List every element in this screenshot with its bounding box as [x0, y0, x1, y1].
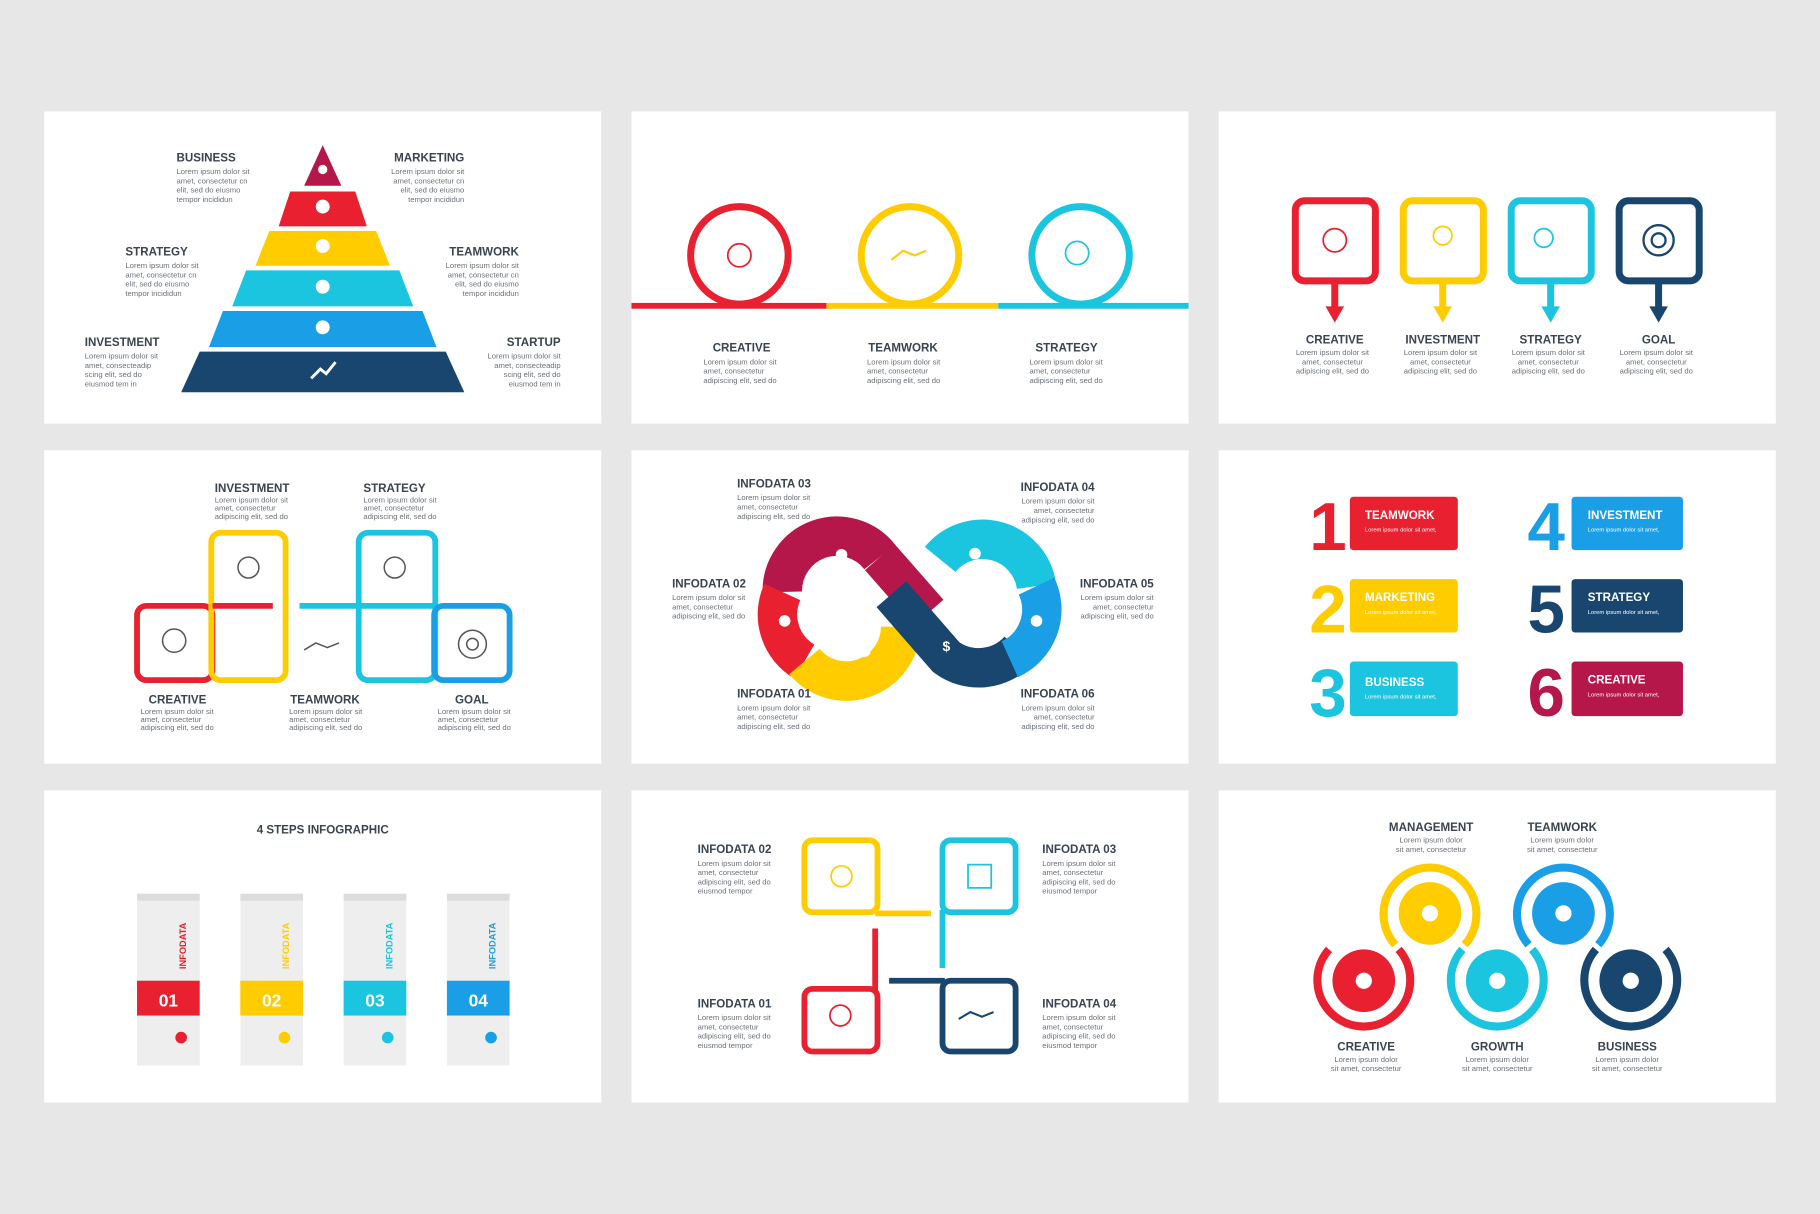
labels: Lorem ipsum dolor sit [1404, 348, 1478, 357]
pillars: 02 [262, 990, 281, 1010]
tab labels: BUSINESS [1365, 676, 1424, 689]
tab labels: Lorem ipsum dolor sit amet, [1588, 610, 1660, 616]
text: marketing: MARKETING [394, 151, 464, 164]
labels: adipiscing elit, sed do [438, 723, 511, 732]
text: business: BUSINESS [176, 151, 236, 164]
text: startup [487, 336, 562, 388]
labels: INFODATA 03 [737, 477, 811, 490]
text: teamwork [867, 342, 941, 385]
text: teamwork: Lorem ipsum dolor sit [867, 357, 941, 366]
panel: 4 steps pillars [44, 790, 601, 1103]
text: teamwork: Lorem ipsum dolor sit [446, 261, 520, 270]
rings [1317, 868, 1677, 1027]
panel: infinity: Lorem ipsum dolor sit [1021, 497, 1095, 506]
text: marketing: elit, sed do eiusmo [400, 186, 464, 195]
text: strategy: Lorem ipsum dolor sit [125, 261, 199, 270]
panel: ring circles [1219, 790, 1776, 1103]
tab labels: CREATIVE [1588, 674, 1646, 687]
text: teamwork: TEAMWORK [868, 342, 938, 355]
labels: Lorem ipsum dolor [1596, 1055, 1659, 1064]
labels: INFODATA 04 [1042, 997, 1117, 1010]
labels: Lorem ipsum dolor sit [737, 493, 811, 502]
infinity icons: $ [942, 638, 950, 654]
tab labels: TEAMWORK [1365, 509, 1435, 522]
labels: adipiscing elit, sed do [289, 723, 362, 732]
text: strategy: Lorem ipsum dolor sit [1030, 357, 1104, 366]
labels: eiusmod tempor [1042, 887, 1098, 896]
text: investment: amet, consecteadip [85, 361, 151, 370]
tabs: 3 [1309, 656, 1347, 731]
labels [672, 477, 811, 731]
infinity icons [779, 548, 1042, 657]
labels: TEAMWORK [1527, 821, 1598, 834]
text: startup: STARTUP [507, 336, 561, 349]
labels: adipiscing elit, sed do [737, 722, 810, 731]
tabs: 6 [1527, 656, 1565, 731]
text: startup: Lorem ipsum dolor sit [487, 352, 562, 361]
labels: adipiscing elit, sed do [737, 512, 810, 521]
panel: four boxes [631, 790, 1189, 1103]
text: business: tempor incididun [176, 195, 233, 204]
labels: adipiscing elit, sed do [1404, 367, 1477, 376]
boxes and connectors [804, 840, 1016, 1052]
labels: eiusmod tempor [1042, 1041, 1098, 1050]
labels: MANAGEMENT [1389, 821, 1473, 834]
text: creative: CREATIVE [713, 342, 771, 355]
labels: Lorem ipsum dolor sit [215, 496, 289, 505]
labels: Lorem ipsum dolor sit [1042, 859, 1116, 868]
text: teamwork [446, 245, 520, 298]
pillars: INFODATA [281, 922, 291, 969]
labels: amet, consectetur [1042, 868, 1104, 877]
labels: amet, consectetur [698, 1022, 759, 1031]
labels: Lorem ipsum dolor sit [438, 707, 512, 716]
pyramid layers [181, 145, 464, 392]
panel: pointer boxes [1219, 111, 1776, 424]
labels: Lorem ipsum dolor sit [672, 593, 746, 602]
labels: GOAL [455, 693, 489, 706]
text: strategy [125, 245, 199, 298]
text: investment: scing elit, sed do [85, 370, 142, 379]
tab labels: Lorem ipsum dolor sit amet, [1365, 695, 1437, 701]
pillars: INFODATA [178, 922, 188, 969]
labels: BUSINESS [1598, 1040, 1657, 1053]
labels: Lorem ipsum dolor [1531, 836, 1594, 845]
title: 4 STEPS INFOGRAPHIC [257, 823, 389, 836]
labels: Lorem ipsum dolor sit [1296, 348, 1370, 357]
labels: adipiscing elit, sed do [141, 723, 214, 732]
text: creative: amet, consectetur [703, 367, 765, 376]
labels: Lorem ipsum dolor sit [698, 859, 772, 868]
labels: GROWTH [1471, 1040, 1524, 1053]
text: strategy: STRATEGY [1035, 342, 1098, 355]
pillars: 01 [159, 990, 178, 1010]
panel: infinity: adipiscing elit, sed do [1021, 515, 1095, 524]
tabs: 1 [1309, 490, 1347, 565]
text: investment [85, 336, 160, 388]
text: strategy: adipiscing elit, sed do [1030, 376, 1103, 385]
text: teamwork: adipiscing elit, sed do [867, 376, 940, 385]
panel: infinity: Lorem ipsum dolor sit [1021, 703, 1095, 712]
labels: INFODATA 02 [698, 843, 771, 856]
pillars: INFODATA [384, 922, 394, 969]
labels: CREATIVE [149, 693, 207, 706]
labels: amet, consectetur [141, 715, 202, 724]
labels: amet, consectetur [1518, 357, 1579, 366]
text: strategy: STRATEGY [125, 245, 188, 258]
text: business [176, 151, 251, 204]
panel: infinity: amet, consectetur [1093, 602, 1154, 611]
tabs [1309, 490, 1683, 731]
labels: CREATIVE [1306, 334, 1364, 347]
labels: sit amet, consectetur [1462, 1064, 1533, 1073]
text: marketing [391, 151, 465, 204]
labels: adipiscing elit, sed do [1042, 1032, 1116, 1041]
labels: adipiscing elit, sed do [698, 877, 771, 886]
panel: numbered tabs [1219, 450, 1776, 764]
text: teamwork: TEAMWORK [449, 245, 519, 258]
text: business: Lorem ipsum dolor sit [176, 167, 251, 176]
tabs: 4 [1527, 490, 1565, 565]
text: teamwork: amet, consectetur [867, 367, 928, 376]
text: strategy: amet, consectetur cn [125, 270, 197, 279]
labels [698, 843, 1117, 1050]
zigzag shapes [137, 533, 510, 680]
pillars: 04 [469, 990, 488, 1010]
text: teamwork: amet, consectetur cn [448, 270, 519, 279]
panel: infinity: INFODATA 06 [1021, 688, 1095, 701]
labels: eiusmod tempor [698, 1041, 753, 1050]
text: marketing: tempor incididun [408, 195, 464, 204]
text: marketing: amet, consectetur cn [393, 176, 464, 185]
text: startup: scing elit, sed do [504, 370, 561, 379]
labels: amet, consectetur [363, 504, 425, 513]
labels: amet, consectetur [215, 504, 276, 513]
tabs: 5 [1527, 573, 1565, 648]
labels: Lorem ipsum dolor sit [141, 707, 215, 716]
labels: adipiscing elit, sed do [215, 512, 288, 521]
labels: amet, consectetur [289, 715, 350, 724]
labels: GOAL [1642, 334, 1675, 347]
text: investment: eiusmod tem in [85, 379, 137, 388]
labels: Lorem ipsum dolor sit [289, 707, 363, 716]
labels: Lorem ipsum dolor sit [1620, 348, 1694, 357]
labels: adipiscing elit, sed do [672, 612, 745, 621]
tab labels: Lorem ipsum dolor sit amet, [1365, 610, 1437, 616]
labels: TEAMWORK [290, 693, 360, 706]
labels: amet, consectetur [672, 602, 733, 611]
timeline line [631, 207, 1189, 309]
labels: Lorem ipsum dolor [1399, 836, 1463, 845]
text: startup: eiusmod tem in [509, 379, 561, 388]
text: creative: adipiscing elit, sed do [703, 376, 777, 385]
labels: adipiscing elit, sed do [698, 1032, 771, 1041]
labels: sit amet, consectetur [1592, 1064, 1663, 1073]
panel: infinity: amet, consectetur [1034, 506, 1095, 515]
labels: amet, consectetur [1042, 1022, 1104, 1031]
labels: adipiscing elit, sed do [1620, 367, 1693, 376]
tab labels: MARKETING [1365, 591, 1435, 604]
labels: INFODATA 01 [737, 688, 811, 701]
tab labels: STRATEGY [1588, 591, 1650, 604]
text: investment: INVESTMENT [85, 336, 160, 349]
text: business: amet, consectetur cn [176, 176, 248, 185]
labels: amet, consectetur [737, 503, 798, 512]
labels: amet, consectetur [438, 715, 499, 724]
labels: adipiscing elit, sed do [1512, 367, 1585, 376]
labels [1331, 821, 1663, 1073]
labels: INVESTMENT [1405, 334, 1480, 347]
pointer boxes [1295, 201, 1699, 323]
panel: infinity: adipiscing elit, sed do [1021, 722, 1095, 731]
labels: Lorem ipsum dolor sit [737, 703, 811, 712]
labels: INFODATA 01 [698, 997, 772, 1010]
labels: eiusmod tempor [698, 887, 753, 896]
labels: adipiscing elit, sed do [1042, 877, 1116, 886]
labels: amet, consectetur [1626, 357, 1687, 366]
text: strategy [1030, 342, 1104, 385]
pillars: 03 [365, 990, 385, 1010]
text: strategy: amet, consectetur [1030, 367, 1091, 376]
labels: sit amet, consectetur [1331, 1064, 1402, 1073]
tab labels [1365, 509, 1663, 701]
panel: infinity: Lorem ipsum dolor sit [1081, 593, 1155, 602]
panel: infinity: adipiscing elit, sed do [1081, 612, 1154, 621]
panel: zigzag steps [44, 450, 601, 764]
tab labels: Lorem ipsum dolor sit amet, [1588, 692, 1660, 698]
labels [1296, 334, 1694, 376]
labels: CREATIVE [1337, 1040, 1395, 1053]
tab labels: Lorem ipsum dolor sit amet, [1588, 528, 1660, 534]
panel: infinity: amet, consectetur [1034, 713, 1095, 722]
labels: amet, consectetur [737, 713, 798, 722]
labels: sit amet, consectetur [1527, 845, 1598, 854]
text: creative [703, 342, 777, 385]
text: business: elit, sed do eiusmo [176, 186, 240, 195]
labels: Lorem ipsum dolor sit [698, 1013, 772, 1022]
text: teamwork: elit, sed do eiusmo [455, 280, 519, 289]
tab labels: Lorem ipsum dolor sit amet, [1365, 528, 1437, 534]
pillars: INFODATA [488, 922, 498, 969]
labels: Lorem ipsum dolor sit [1512, 348, 1586, 357]
text: strategy: tempor incididun [125, 289, 182, 298]
panel: infinity: INFODATA 04 [1021, 481, 1095, 494]
panel: pyramid [44, 111, 601, 424]
text: startup: amet, consecteadip [494, 361, 561, 370]
text: teamwork: tempor incididun [463, 289, 519, 298]
labels: STRATEGY [363, 482, 426, 495]
labels: STRATEGY [1520, 334, 1582, 347]
labels: INFODATA 03 [1042, 843, 1117, 856]
text: creative: Lorem ipsum dolor sit [703, 357, 777, 366]
labels: INVESTMENT [215, 482, 290, 495]
labels: sit amet, consectetur [1396, 845, 1467, 854]
labels: Lorem ipsum dolor [1334, 1055, 1398, 1064]
labels: Lorem ipsum dolor sit [1042, 1013, 1116, 1022]
panel: circle timeline [631, 111, 1189, 424]
labels: INFODATA 02 [672, 577, 746, 590]
labels: amet, consectetur [698, 868, 759, 877]
tab labels: INVESTMENT [1588, 509, 1663, 522]
labels: Lorem ipsum dolor [1466, 1055, 1529, 1064]
labels: Lorem ipsum dolor sit [363, 496, 437, 505]
labels: adipiscing elit, sed do [1296, 367, 1369, 376]
text: investment: Lorem ipsum dolor sit [85, 352, 159, 361]
panel: infinity: INFODATA 05 [1080, 577, 1154, 590]
labels [141, 482, 512, 732]
pillars [137, 894, 510, 1065]
labels: amet, consectetur [1302, 357, 1363, 366]
labels: amet, consectetur [1410, 357, 1471, 366]
infinity loop [777, 536, 1042, 681]
labels: adipiscing elit, sed do [363, 512, 437, 521]
tabs: 2 [1309, 573, 1347, 648]
text: marketing: Lorem ipsum dolor sit [391, 167, 465, 176]
panel: infinity [631, 450, 1189, 764]
text: strategy: elit, sed do eiusmo [125, 280, 189, 289]
